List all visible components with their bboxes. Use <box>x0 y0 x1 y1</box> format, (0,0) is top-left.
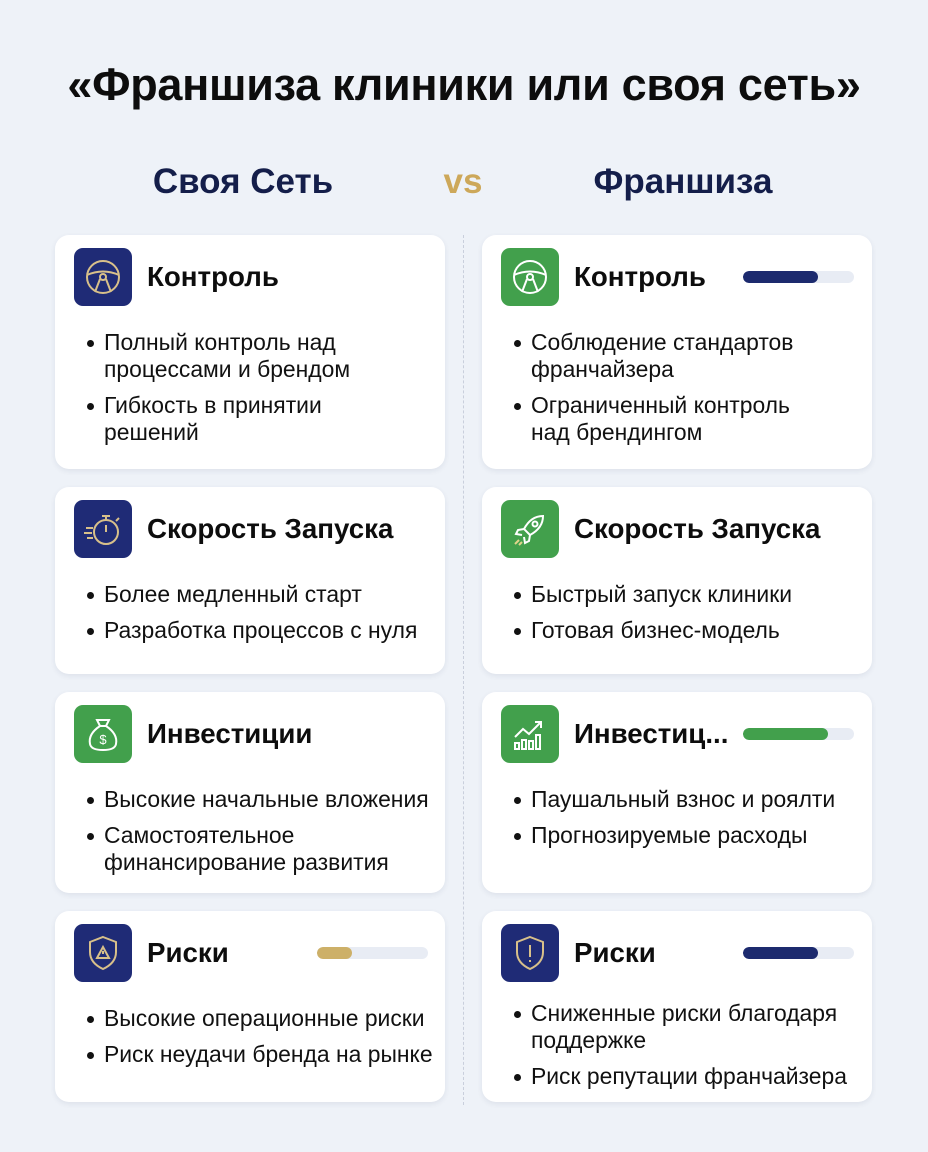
icon: rocket <box>501 500 559 558</box>
bullets: франчайзера <box>531 356 674 382</box>
column header: franchise: Франшиза <box>594 162 772 201</box>
bullets <box>87 786 429 875</box>
bullets: Риск репутации франчайзера <box>531 1063 847 1089</box>
bullets <box>87 1005 433 1067</box>
heading: Риски <box>574 937 656 968</box>
bullets <box>87 581 417 643</box>
bullets <box>87 329 350 445</box>
bullets: Высокие операционные риски <box>104 1005 425 1031</box>
heading: Инвестиции <box>147 718 312 749</box>
bullets: Прогнозируемые расходы <box>531 822 807 848</box>
panel: own launch speed <box>55 487 445 674</box>
bullets: Риск неудачи бренда на рынке <box>104 1041 433 1067</box>
icon: money bag: $ <box>99 732 107 747</box>
vs label: vs <box>444 162 482 201</box>
icon: money bag <box>74 705 132 763</box>
panel: franchise investments <box>482 692 872 893</box>
bullets: решений <box>104 419 199 445</box>
bullets: Ограниченный контроль <box>531 392 790 418</box>
panel: franchise launch speed <box>482 487 872 674</box>
bullets: Готовая бизнес-модель <box>531 617 780 643</box>
progress bar <box>743 728 854 740</box>
bullets: Разработка процессов с нуля <box>104 617 417 643</box>
heading: Контроль <box>574 261 706 292</box>
bullets: Соблюдение стандартов <box>531 329 793 355</box>
bullets: над брендингом <box>531 419 702 445</box>
bullets <box>514 786 835 848</box>
title: «Франшиза клиники или своя сеть» <box>67 59 861 110</box>
icon: shield warning <box>74 924 132 982</box>
progress bar <box>317 947 428 959</box>
column header: own network: Своя Сеть <box>153 162 333 201</box>
bullets: Высокие начальные вложения <box>104 786 429 812</box>
bullets: Полный контроль над <box>104 329 336 355</box>
bullets: Гибкость в принятии <box>104 392 322 418</box>
panel: franchise risks <box>482 911 872 1102</box>
heading: Контроль <box>147 261 279 292</box>
icon: growth chart <box>501 705 559 763</box>
heading: Риски <box>147 937 229 968</box>
icon: steering wheel <box>501 248 559 306</box>
bullets: Сниженные риски благодаря <box>531 1000 837 1026</box>
bullets <box>514 581 792 643</box>
bullets <box>514 329 793 445</box>
heading: Инвестиц... <box>574 718 728 749</box>
bullets: Быстрый запуск клиники <box>531 581 792 607</box>
bullets: поддержке <box>531 1027 646 1053</box>
progress bar <box>743 947 854 959</box>
icon: steering wheel <box>74 248 132 306</box>
bullets: процессами и брендом <box>104 356 350 382</box>
bullets: Более медленный старт <box>104 581 362 607</box>
bullets: Паушальный взнос и роялти <box>531 786 835 812</box>
heading: Скорость Запуска <box>147 513 393 544</box>
icon: stopwatch <box>74 500 132 558</box>
panel: franchise control <box>482 235 872 469</box>
panel: own investments <box>55 692 445 893</box>
icon: shield exclamation <box>501 924 559 982</box>
heading: Скорость Запуска <box>574 513 820 544</box>
bullets: финансирование развития <box>104 849 389 875</box>
progress bar <box>743 271 854 283</box>
bullets <box>514 1000 847 1089</box>
panel: own risks <box>55 911 445 1102</box>
bullets: Самостоятельное <box>104 822 294 848</box>
panel: own control <box>55 235 445 469</box>
